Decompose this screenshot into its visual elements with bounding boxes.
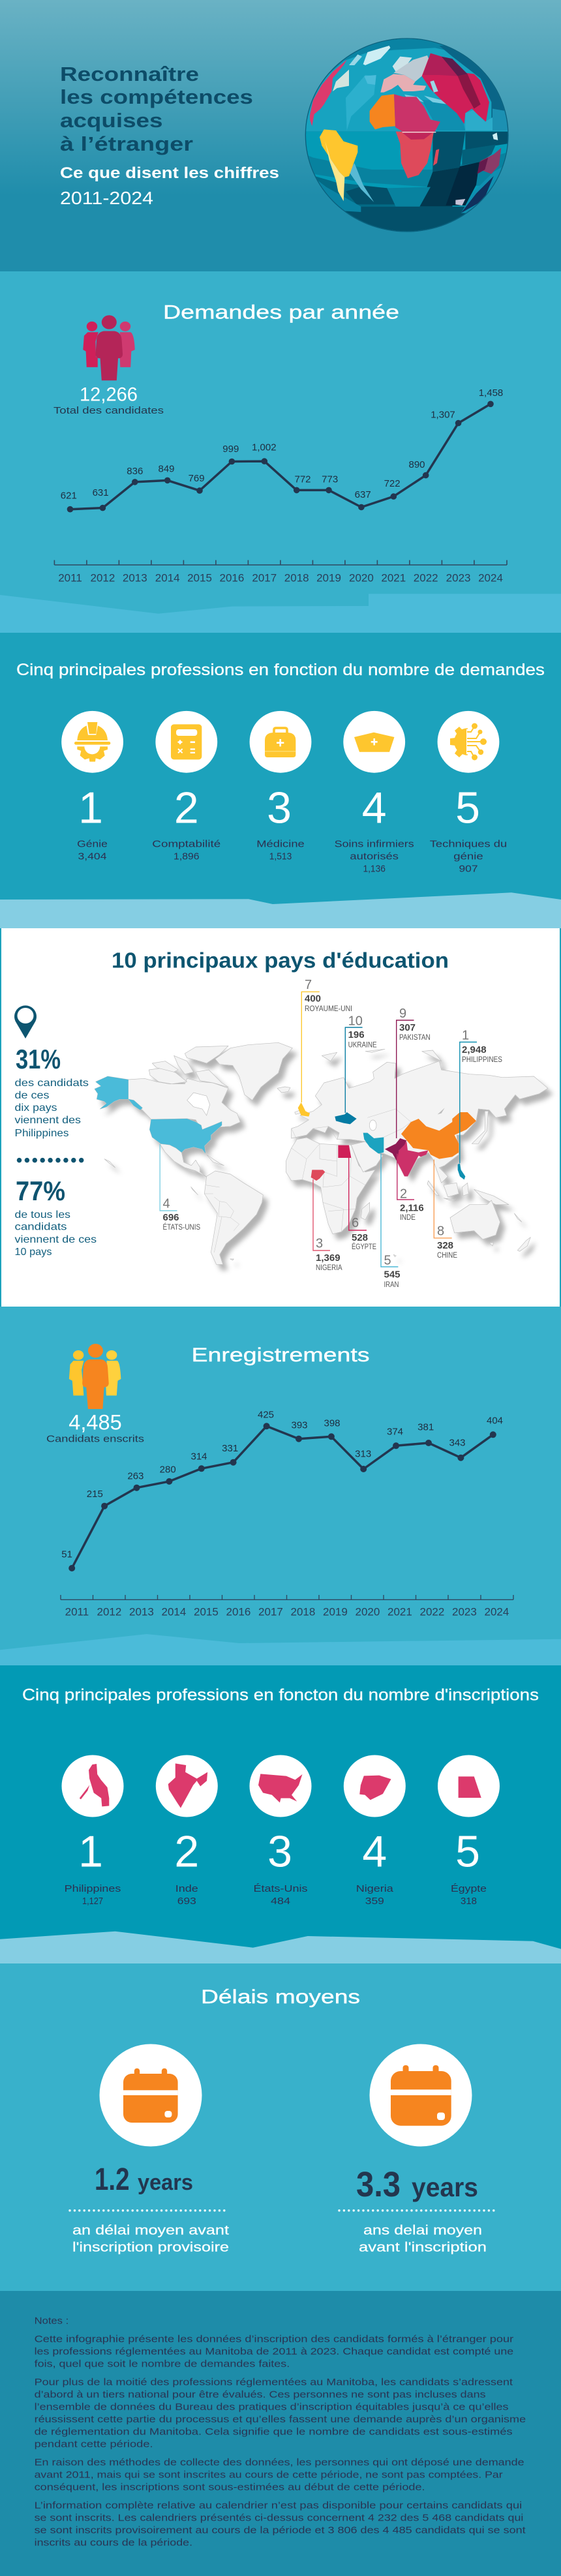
caption: provisional registration: l'inscription provisoire: [72, 2241, 229, 2255]
profession labels: 907: [459, 863, 478, 874]
country labels: 318: [461, 1896, 477, 1907]
callout: rank 3 Nigeria: NIGERIA: [316, 1264, 342, 1272]
notes text: l’ensemble de données du Bureau des pratiques d’inscription équitables jusqu’à ce qu’elles: [35, 2402, 509, 2413]
icon: Egypt map: [438, 1755, 500, 1817]
line chart: registrations: 331: [222, 1443, 238, 1454]
heading: Enregistrements: [192, 1344, 369, 1366]
profession labels: Génie: [77, 838, 108, 849]
line chart: registrations: 215: [87, 1489, 103, 1500]
line chart: registrations: 280: [160, 1464, 176, 1476]
line chart: applications: 2015: [187, 571, 212, 584]
map country: India: [397, 1142, 429, 1176]
stat: 31 percent: [14, 1044, 89, 1139]
icon: calendar right: [369, 2044, 472, 2146]
notes text: [35, 2315, 526, 2549]
callout: rank 1 Philippines: PHILIPPINES: [462, 1056, 502, 1064]
total applicants: Total des candidates: [53, 405, 164, 416]
stat: 1.2 years: 1.2: [95, 2162, 129, 2197]
caption: provisional registration: an délai moyen avant: [72, 2224, 230, 2238]
profession labels: 1,896: [174, 851, 200, 862]
line chart: applications: 2021: [381, 571, 406, 584]
rank numbers: [78, 783, 480, 833]
line chart: applications: 2014: [155, 571, 180, 584]
notes text: Cette infographie présente les données d’inscription des candidats formés à l’étranger pour: [35, 2334, 513, 2345]
line chart: applications: 722: [384, 478, 401, 489]
icon: calendar left: [99, 2044, 202, 2146]
line chart: registrations: 263: [127, 1471, 144, 1482]
profession labels: 1,136: [363, 863, 386, 874]
line chart: applications: 2019: [316, 571, 341, 584]
icon: medical bag: [250, 711, 311, 773]
line chart: registrations: 2023: [452, 1606, 477, 1618]
total registered: [46, 1411, 144, 1445]
line chart: applications: 1,307: [431, 410, 455, 421]
callout: rank 3 Nigeria: 3: [316, 1237, 323, 1251]
callout: rank 9 Pakistan: 9: [399, 1007, 406, 1021]
title: acquises: [60, 109, 163, 132]
stat: 77 percent: 10 pays: [14, 1247, 52, 1258]
line chart: registrations: 2013: [129, 1606, 154, 1618]
rank numbers: 1: [78, 1827, 103, 1877]
line chart: registrations: [61, 1410, 513, 1618]
country labels: Philippines: [65, 1883, 121, 1894]
notes text: se sont inscrits provisoirement au cours de la période et 3 806 des 4 485 candidats qui se sont: [35, 2525, 526, 2536]
line chart: registrations: 313: [355, 1448, 371, 1459]
line chart: registrations: 425: [258, 1410, 274, 1421]
callout: rank 3 Nigeria: [313, 1179, 342, 1272]
panel: notes: [0, 2291, 561, 2576]
rank numbers: 3: [267, 1827, 292, 1877]
wave band: [0, 892, 561, 928]
callout: rank 7 Royaume-Uni: ROYAUME-UNI: [305, 1005, 352, 1013]
notes text: fois, quel que soit le nombre de demandes faites.: [35, 2359, 290, 2370]
country labels: 359: [365, 1896, 384, 1907]
profession labels: Techniques du: [430, 838, 507, 849]
callout: rank 8 Chine: [434, 1160, 457, 1260]
line chart: applications: 999: [222, 444, 239, 455]
callout: rank 1 Philippines: 1: [462, 1029, 469, 1043]
callout: rank 4 Etats-Unis: 696: [163, 1212, 179, 1223]
line chart: applications: 2012: [90, 571, 115, 584]
line chart: registrations: 2014: [161, 1606, 186, 1618]
icon: Nigeria map: [344, 1755, 406, 1817]
rank numbers: 5: [455, 1827, 480, 1877]
callout: rank 6 Egypte: ÉGYPTE: [352, 1243, 376, 1251]
line chart: applications: 637: [355, 489, 371, 500]
map country: Iran: [363, 1133, 384, 1153]
callout: rank 8 Chine: 328: [437, 1240, 453, 1251]
map country: Nigeria: [311, 1170, 325, 1181]
map country: China: [401, 1112, 476, 1159]
callout: rank 2 Inde: INDE: [400, 1214, 416, 1222]
callout: rank 2 Inde: 2,116: [400, 1202, 424, 1213]
rank numbers: 5: [455, 783, 480, 833]
panel: top five countries by registrations: [0, 1665, 561, 1963]
stat: 31 percent: de ces: [14, 1090, 50, 1101]
total applicants: [53, 384, 164, 416]
country labels: 693: [177, 1896, 196, 1907]
line chart: applications: 2018: [284, 571, 309, 584]
line chart: applications: 773: [322, 474, 338, 485]
country labels: [65, 1883, 487, 1907]
callout: rank 4 Etats-Unis: [160, 1144, 200, 1232]
subtitle: Ce que disent les chiffres: [60, 164, 279, 182]
wave band: [0, 1932, 561, 1963]
rank numbers: 3: [267, 783, 292, 833]
callout: rank 10 Ukraine: UKRAINE: [348, 1041, 377, 1049]
callout: rank 9 Pakistan: PAKISTAN: [399, 1034, 431, 1042]
line chart: applications: 2013: [123, 571, 147, 584]
callout: rank 8 Chine: CHINE: [437, 1252, 457, 1260]
line chart: registrations: 314: [190, 1451, 207, 1462]
heading: Cinq principales professions en foncton du nombre d'inscriptions: [22, 1686, 539, 1705]
caption: registration: [359, 2224, 487, 2255]
callout: rank 4 Etats-Unis: ÉTATS-UNIS: [163, 1223, 200, 1232]
rank numbers: 4: [362, 1827, 387, 1877]
stat: 31 percent: des candidats: [14, 1078, 89, 1089]
icon: calculator: [155, 711, 217, 773]
map country: Ukraine: [335, 1112, 357, 1124]
title: [60, 63, 253, 155]
line chart: applications: 631: [93, 487, 109, 498]
stat: 1.2 years: years: [138, 2170, 193, 2195]
line chart: applications: 1,002: [252, 442, 277, 453]
title: à l’étranger: [60, 132, 193, 155]
title: les compétences: [60, 85, 253, 108]
total registered: Candidats enscrits: [46, 1434, 144, 1445]
date range: 2011-2024: [60, 188, 153, 208]
notes text: conséquent, les inscriptions sont sous-estimées au début de cette période.: [35, 2482, 425, 2493]
line chart: registrations: 374: [387, 1426, 403, 1437]
map country: Pakistan: [385, 1138, 406, 1161]
stat: 77 percent: [14, 1175, 97, 1258]
stat: 3.3 years: [356, 2165, 478, 2204]
country labels: Nigeria: [356, 1883, 394, 1894]
notes text: réussissent cette partie du processus et qu’elles fassent une demande auprès d’un organisme: [35, 2414, 526, 2425]
callout: rank 6 Egypte: [349, 1157, 376, 1251]
heading: Cinq principales professions en fonction du nombre de demandes: [16, 661, 545, 679]
stat: 77 percent: candidats: [14, 1222, 67, 1233]
line chart: applications: 2016: [219, 571, 244, 584]
profession labels: Médicine: [256, 838, 305, 849]
line chart: registrations: 51: [61, 1549, 72, 1560]
line chart: applications: 772: [294, 474, 311, 485]
icon: USA map: [249, 1755, 312, 1817]
notes text: d’abord à un tiers national pour être évalués. Ces personnes ne sont pas incluses dans: [35, 2389, 486, 2401]
line chart: registrations: 393: [291, 1419, 308, 1431]
icon: India map: [156, 1755, 218, 1817]
line chart: applications: [54, 387, 507, 584]
callout: rank 1 Philippines: 2,948: [462, 1044, 487, 1055]
callout: rank 8 Chine: 8: [437, 1224, 444, 1239]
stat: 31 percent: dix pays: [14, 1102, 57, 1114]
callout: rank 6 Egypte: 528: [352, 1232, 368, 1243]
callout: rank 5 Iran: [381, 1154, 401, 1289]
line chart: applications: 2024: [478, 571, 503, 584]
line chart: applications: 836: [127, 466, 143, 477]
stat: 31 percent: viennent des: [14, 1115, 81, 1126]
stat: 31 percent: 31%: [16, 1044, 61, 1074]
total applicants: 12,266: [80, 384, 138, 406]
callout: rank 2 Inde: [397, 1154, 424, 1222]
callout: rank 4 Etats-Unis: 4: [163, 1196, 170, 1211]
country labels: Égypte: [451, 1883, 487, 1894]
callout: rank 10 Ukraine: [345, 1014, 377, 1113]
country labels: 484: [271, 1896, 290, 1907]
line chart: registrations: 2022: [419, 1606, 444, 1618]
line chart: applications: 2022: [414, 571, 438, 584]
total registered: 4,485: [68, 1411, 122, 1434]
profession labels: 3,404: [78, 851, 107, 862]
profession labels: génie: [453, 851, 483, 862]
icon: engineering technology: [438, 711, 499, 773]
line chart: registrations: 398: [324, 1418, 341, 1429]
dotted divider: [20, 1158, 82, 1162]
notes text: L’information complète relative au calendrier n’est pas disponible pour certains candidats qui: [35, 2500, 522, 2511]
heading: 10 principaux pays d'éducation: [112, 948, 449, 973]
rank numbers: 4: [362, 783, 387, 833]
rank numbers: [78, 1827, 480, 1877]
notes text: de réglementation du Manitoba. Cela signifie que le nombre de candidats est sous-estimés: [35, 2427, 513, 2438]
panel: delais moyens: [0, 1963, 561, 2291]
world map: [95, 1042, 548, 1264]
icon: engineering helmet: [61, 711, 123, 773]
rank numbers: 1: [78, 783, 103, 833]
icon: people group: [83, 315, 135, 380]
stat: 3.3 years: 3.3: [356, 2165, 401, 2204]
notes text: se sont inscrits. Les calendriers présentés ci-dessus concernent 4 232 des 5 468 candidats qui: [35, 2513, 523, 2524]
notes text: avant 2011, mais qui se sont inscrites au cours de cette période, ne sont pas comptées. Par: [35, 2470, 503, 2481]
callout: rank 1 Philippines: [460, 1029, 502, 1163]
stat: 77 percent: 77%: [16, 1175, 65, 1206]
callout: rank 5 Iran: 545: [384, 1269, 401, 1280]
callout: rank 6 Egypte: 6: [352, 1216, 359, 1230]
callout: rank 2 Inde: 2: [400, 1187, 407, 1201]
heading: Demandes par année: [163, 302, 399, 324]
profession labels: autorisés: [350, 851, 399, 862]
profession labels: Soins infirmiers: [335, 838, 414, 849]
map country: Philippines: [458, 1163, 465, 1179]
callout: rank 10 Ukraine: 10: [348, 1014, 363, 1028]
line chart: applications: 769: [189, 473, 205, 484]
line chart: applications: 849: [158, 464, 175, 475]
notes text: pendant cette période.: [35, 2439, 153, 2450]
panel: enregistrements: [0, 1307, 561, 1665]
callout: rank 9 Pakistan: [397, 1007, 431, 1138]
line chart: registrations: 2011: [65, 1606, 89, 1618]
line chart: registrations: 2015: [194, 1606, 219, 1618]
icon: location pin: [14, 1005, 37, 1038]
notes text: Pour plus de la moitié des professions réglementées au Manitoba, les candidats s’adressent: [35, 2377, 513, 2388]
notes text: Notes :: [35, 2315, 68, 2326]
icon: globe: [300, 33, 515, 235]
line chart: applications: 2023: [446, 571, 471, 584]
line chart: registrations: 2020: [355, 1606, 380, 1618]
notes text: les professions réglementées au Manitoba de 2011 à 2023. Chaque candidat est compté une: [35, 2346, 513, 2357]
line chart: applications: 1,458: [479, 387, 503, 399]
title: Reconnaître: [60, 63, 199, 85]
caption: registration: ans delai moyen: [363, 2224, 482, 2238]
country labels: 1,127: [82, 1896, 103, 1907]
profession labels: Comptabilité: [152, 838, 220, 849]
line chart: registrations: 2012: [97, 1606, 121, 1618]
line chart: applications: 621: [61, 491, 77, 502]
map country: United Kingdom: [298, 1102, 310, 1117]
stat: 3.3 years: years: [412, 2172, 478, 2202]
rank numbers: 2: [174, 783, 199, 833]
line chart: registrations: 2021: [387, 1606, 412, 1618]
notes text: En raison des méthodes de collecte des données, les personnes qui ont déposé une demande: [35, 2457, 524, 2468]
line chart: registrations: 2019: [323, 1606, 348, 1618]
callout: rank 3 Nigeria: 1,369: [316, 1252, 341, 1264]
dotted dividers: [70, 2209, 498, 2211]
panel: header: [0, 0, 561, 271]
map country: Egypt: [338, 1145, 351, 1158]
caption: provisional registration: [72, 2224, 230, 2255]
profession labels: 1,513: [269, 851, 292, 862]
panel: demandes par annee: [0, 271, 561, 633]
notes text: inscrits au cours de la période.: [35, 2538, 192, 2549]
line chart: registrations: 2017: [258, 1606, 283, 1618]
callout: rank 7 Royaume-Uni: [301, 978, 352, 1102]
rank numbers: 2: [174, 1827, 199, 1877]
line chart: applications: 2020: [349, 571, 374, 584]
callout: rank 7 Royaume-Uni: 400: [305, 993, 321, 1005]
panel: top ten countries of education: [0, 928, 561, 2576]
wave band: [0, 594, 561, 633]
country labels: États-Unis: [253, 1883, 308, 1894]
stat: 77 percent: de tous les: [14, 1209, 70, 1220]
line chart: applications: 2017: [252, 571, 277, 584]
callout: rank 5 Iran: IRAN: [384, 1281, 399, 1289]
line chart: applications: 2011: [58, 571, 82, 584]
stat: 1.2 years: [95, 2162, 193, 2197]
country labels: Inde: [175, 1883, 198, 1894]
callout: rank 7 Royaume-Uni: 7: [305, 978, 312, 992]
line chart: registrations: 2018: [290, 1606, 315, 1618]
profession labels: [77, 838, 507, 874]
stat: 77 percent: viennent de ces: [14, 1234, 97, 1245]
heading: Délais moyens: [201, 1986, 360, 2008]
line chart: applications: 890: [408, 459, 425, 470]
caption: registration: avant l'inscription: [359, 2241, 487, 2255]
icon: people group: [69, 1344, 121, 1409]
icon: nurse cap: [343, 711, 405, 773]
panel: top five professions by applications: [0, 633, 561, 928]
callout: rank 9 Pakistan: 307: [399, 1022, 416, 1033]
wave band: [0, 1634, 561, 1665]
line chart: registrations: 404: [487, 1416, 503, 1427]
line chart: registrations: 2016: [226, 1606, 250, 1618]
icon: Philippines map: [61, 1755, 124, 1817]
line chart: registrations: 2024: [484, 1606, 509, 1618]
callout: rank 10 Ukraine: 196: [348, 1029, 365, 1040]
line chart: registrations: 381: [417, 1422, 434, 1433]
stat: 31 percent: Philippines: [14, 1128, 68, 1139]
line chart: registrations: 343: [449, 1438, 466, 1449]
callout: rank 5 Iran: 5: [384, 1254, 391, 1268]
